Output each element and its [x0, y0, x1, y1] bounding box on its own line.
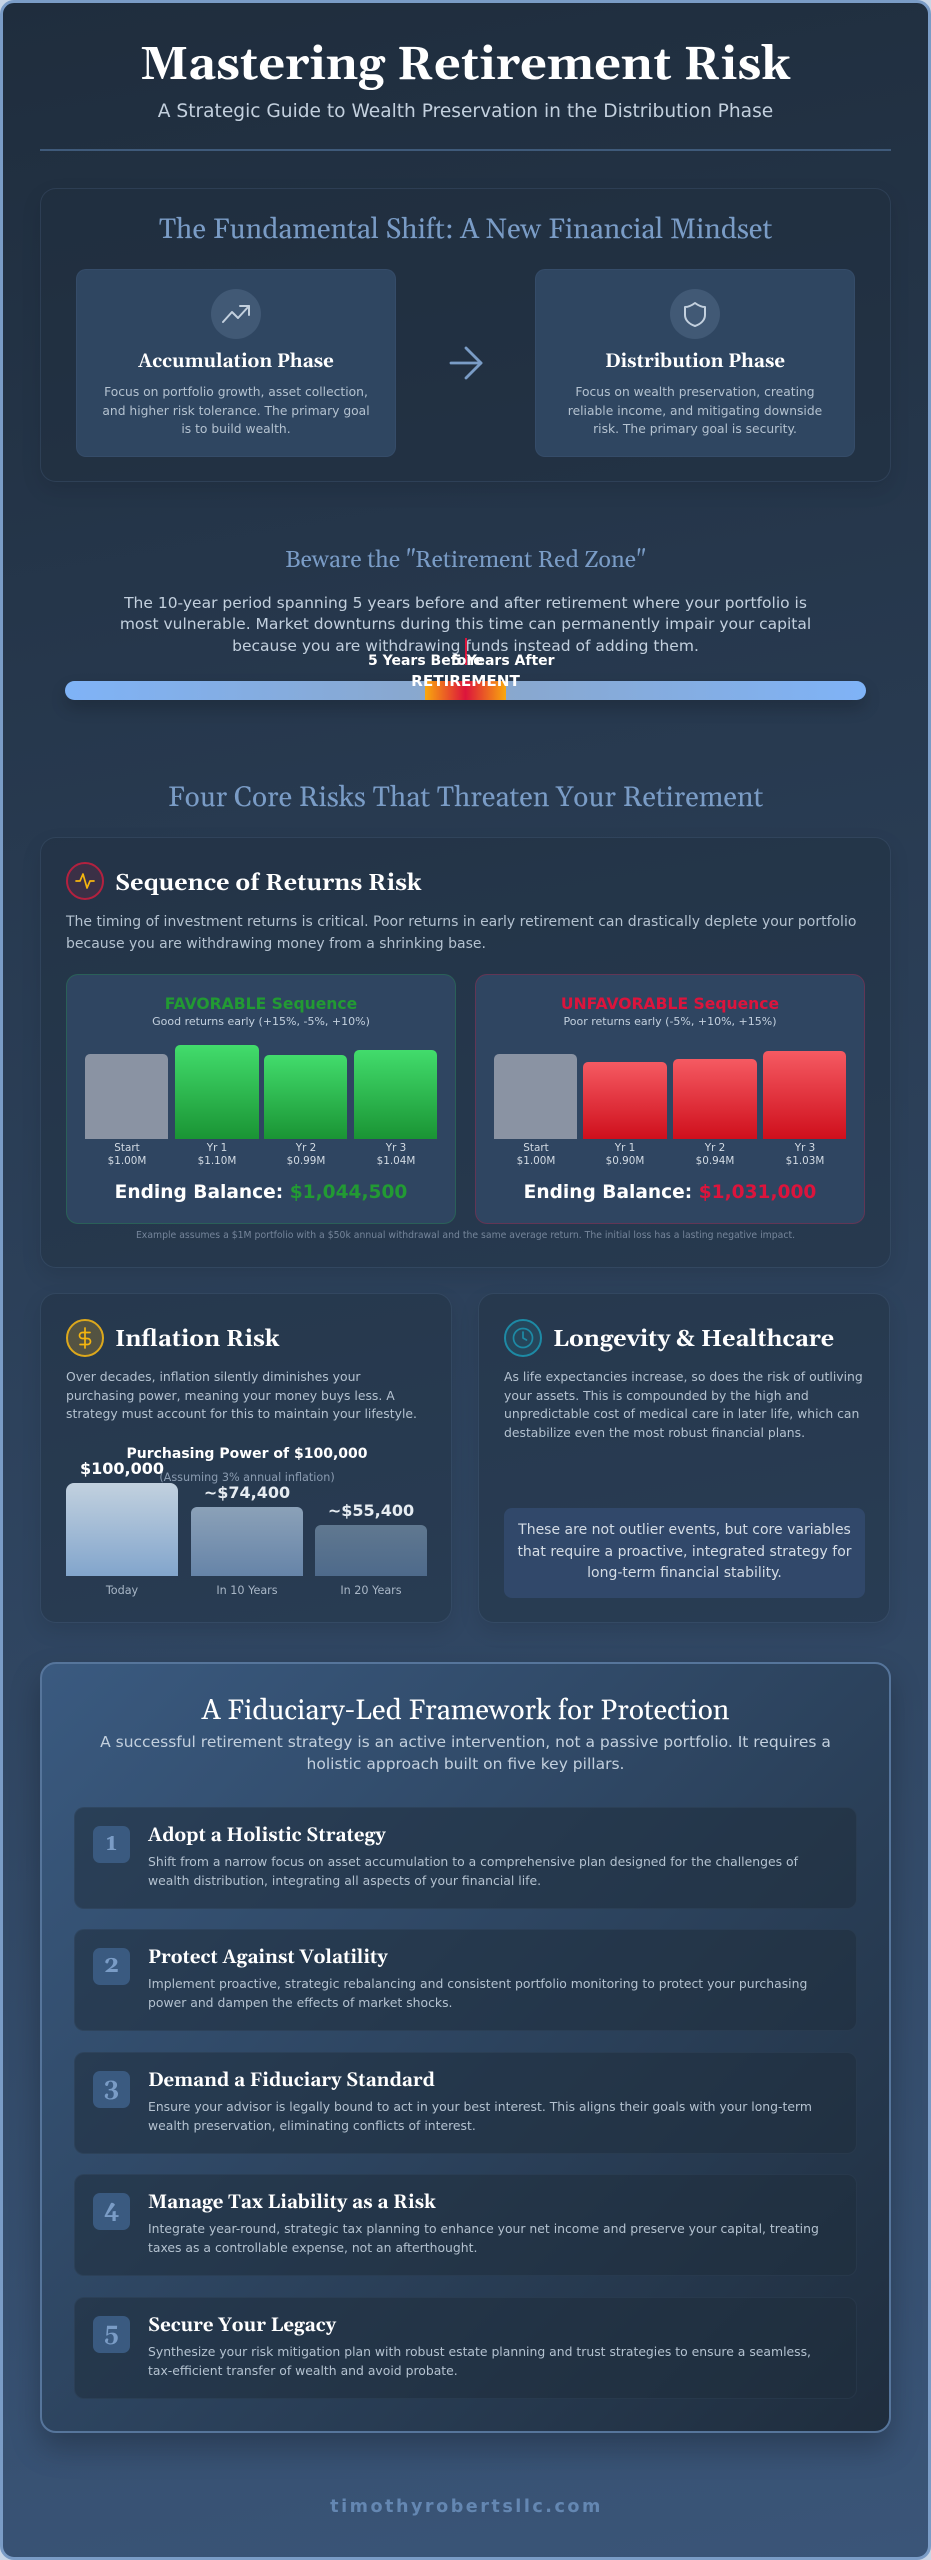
footer: timothyrobertsllc.com — [330, 2497, 603, 2517]
panel: fiduciary-led framework — [40, 1662, 891, 2433]
label: year 2: Yr 2 — [705, 1142, 725, 1154]
label: start: Start — [114, 1142, 140, 1154]
retirement marker — [465, 638, 467, 665]
card: distribution phase — [535, 269, 855, 457]
phase description: Focus on wealth preservation, creating — [575, 385, 815, 399]
phase description — [102, 385, 370, 436]
label: year 2: $0.94M — [696, 1155, 734, 1167]
label: year 2 — [287, 1142, 325, 1167]
heading: framework: A Fiduciary-Led Framework for Protection — [202, 1693, 729, 1729]
phase description: reliable income, and mitigating downside — [568, 404, 822, 418]
pillar description: wealth preservation, eliminating conflicts of interest. — [148, 2118, 476, 2133]
arrow — [450, 346, 482, 380]
callout — [504, 1508, 865, 1598]
risk description: your assets. This is compounded by the high and — [504, 1388, 809, 1403]
card: accumulation phase — [76, 269, 396, 457]
card title: UNFAVORABLE Sequence — [561, 995, 779, 1013]
number — [93, 1826, 130, 1863]
ending balance: Ending Balance: $1,031,000 — [524, 1182, 816, 1203]
text: framework intro: holistic approach built on five key pillars. — [307, 1755, 624, 1773]
pillar title: Adopt a Holistic Strategy — [148, 1825, 386, 1848]
text: framework intro: A successful retirement strategy is an active intervention, not a passive portfolio. It requires a — [100, 1733, 831, 1751]
value: 10 years: ~$74,400 — [204, 1483, 290, 1502]
risk heading: Longevity & Healthcare — [553, 1324, 834, 1354]
label: year 1: Yr 1 — [615, 1142, 635, 1154]
callout: that require a proactive, integrated strategy for — [517, 1544, 852, 1560]
bar: 20 years — [315, 1525, 427, 1576]
pillar 5 — [74, 2297, 857, 2399]
risk description — [504, 1369, 863, 1440]
risk description: The timing of investment returns is critical. Poor returns in early retirement can drastically deplete your portfolio — [66, 914, 856, 930]
text: red zone description: The 10-year period spanning 5 years before and after retirement where your portfolio is — [124, 594, 807, 612]
pillar description: Synthesize your risk mitigation plan with robust estate planning and trust strategies to ensure a seamless, — [148, 2344, 811, 2359]
bar: 10 years — [191, 1507, 302, 1576]
phase description: is to build wealth. — [181, 422, 291, 436]
subtitle: A Strategic Guide to Wealth Preservation in the Distribution Phase — [158, 101, 773, 122]
pillar 2 — [74, 1929, 857, 2031]
risk description: As life expectancies increase, so does the risk of outliving — [504, 1369, 863, 1384]
label: year 3 — [786, 1142, 824, 1167]
text: red zone description: because you are withdrawing funds instead of adding them. — [232, 637, 699, 655]
label: years after: 5 Years After — [452, 653, 555, 669]
label: year 1 — [606, 1142, 644, 1167]
label: today: Today — [106, 1584, 138, 1597]
ending balance: Ending Balance: $1,044,500 — [115, 1182, 407, 1203]
label: start: $1.00M — [517, 1155, 555, 1167]
pillar description — [148, 2099, 812, 2133]
risk description: destabilize even the most robust financial plans. — [504, 1425, 805, 1440]
bar chart — [85, 1045, 437, 1167]
title: Mastering Retirement Risk — [140, 36, 791, 95]
label: year 3: $1.04M — [377, 1155, 415, 1167]
label: year 1: $1.10M — [198, 1155, 236, 1167]
chart subtitle: (Assuming 3% annual inflation) — [159, 1471, 335, 1484]
label: retirement: RETIREMENT — [411, 672, 520, 690]
label: year 3: Yr 3 — [795, 1142, 815, 1154]
footnote: Example assumes a $1M portfolio with a $50k annual withdrawal and the same average return. The initial loss has a lasting negative impact. — [136, 1230, 795, 1241]
label: year 3: Yr 3 — [386, 1142, 406, 1154]
pillar title: Manage Tax Liability as a Risk — [148, 2192, 436, 2215]
pillar description: Integrate year-round, strategic tax planning to enhance your net income and preserve your capital, treating — [148, 2221, 819, 2236]
icon: trending up — [211, 289, 261, 339]
pillar description — [148, 1976, 807, 2010]
label: start — [517, 1142, 555, 1167]
label: start: Start — [523, 1142, 549, 1154]
label: 20 years: In 20 Years — [340, 1584, 402, 1597]
number — [93, 2071, 130, 2108]
number — [93, 2316, 130, 2353]
pillar 1 — [74, 1807, 857, 1909]
label: year 2 — [696, 1142, 734, 1167]
chart card: unfavorable sequence — [475, 974, 865, 1224]
pillar description: Ensure your advisor is legally bound to act in your best interest. This aligns their goals with your long-term — [148, 2099, 812, 2114]
pillar description: wealth distribution, integrating all aspects of your financial life. — [148, 1873, 541, 1888]
heading: fundamental shift: The Fundamental Shift: A New Financial Mindset — [159, 212, 772, 248]
text: red zone description: most vulnerable. Market downturns during this time can permanently impair your capital — [120, 615, 811, 633]
callout: These are not outlier events, but core variables — [518, 1522, 851, 1538]
phase description — [568, 385, 822, 436]
panel: fundamental shift — [40, 188, 891, 482]
pillar description — [148, 1854, 798, 1888]
pillar description: Implement proactive, strategic rebalancing and consistent portfolio monitoring to protect your purchasing — [148, 1976, 807, 1991]
phase title: Distribution Phase — [605, 351, 785, 374]
pillar title: Demand a Fiduciary Standard — [148, 2070, 435, 2093]
card subtitle: Poor returns early (-5%, +10%, +15%) — [564, 1015, 776, 1028]
label: start — [108, 1142, 146, 1167]
bar: start — [494, 1054, 577, 1139]
number: 5 — [104, 2319, 119, 2349]
risk heading: Sequence of Returns Risk — [115, 868, 422, 898]
pillar 3 — [74, 2052, 857, 2154]
bar: year 2 — [264, 1055, 347, 1139]
bar: start — [85, 1054, 168, 1139]
bar chart: purchasing power — [66, 1446, 427, 1597]
text: framework intro — [100, 1733, 831, 1773]
red zone segment — [425, 681, 506, 700]
panel: longevity and healthcare — [478, 1293, 890, 1623]
chart title: Purchasing Power of $100,000 — [126, 1446, 368, 1462]
icon: activity — [66, 862, 104, 900]
pillar 4 — [74, 2174, 857, 2276]
risk description: purchasing power, meaning your money buys less. A — [66, 1388, 395, 1403]
pillar title: Secure Your Legacy — [148, 2315, 336, 2338]
bar: year 2 — [673, 1059, 757, 1139]
chart card: favorable sequence — [66, 974, 456, 1224]
number — [93, 1948, 130, 1985]
value: 20 years: ~$55,400 — [328, 1501, 414, 1520]
number: 4 — [104, 2196, 119, 2226]
risk description: unpredictable cost of medical care in later life, which can — [504, 1406, 859, 1421]
bar: year 3 — [763, 1051, 846, 1139]
panel: inflation risk — [40, 1293, 452, 1623]
text: red zone description — [120, 594, 811, 655]
label: year 3 — [377, 1142, 415, 1167]
timeline bar — [65, 681, 866, 700]
phase description: and higher risk tolerance. The primary goal — [102, 404, 370, 418]
callout: long-term financial stability. — [587, 1565, 782, 1581]
number: 1 — [106, 1829, 117, 1859]
label: year 1: Yr 1 — [207, 1142, 227, 1154]
label: year 2: Yr 2 — [296, 1142, 316, 1154]
icon: dollar — [66, 1319, 104, 1357]
phase description: Focus on portfolio growth, asset collection, — [104, 385, 368, 399]
value: today: $100,000 — [80, 1459, 164, 1478]
label: 10 years: In 10 Years — [216, 1584, 278, 1597]
bar: today — [66, 1483, 178, 1576]
risk heading: Inflation Risk — [115, 1324, 280, 1354]
pillar description — [148, 2344, 811, 2378]
bar chart — [494, 1051, 846, 1167]
label: year 3: $1.03M — [786, 1155, 824, 1167]
risk description — [66, 914, 856, 952]
label: years before: 5 Years Before — [368, 653, 483, 669]
pillar title: Protect Against Volatility — [148, 1947, 388, 1970]
bar: year 1 — [583, 1062, 667, 1139]
pillar description: tax-efficient transfer of wealth and avoid probate. — [148, 2363, 458, 2378]
panel: sequence of returns risk — [40, 837, 891, 1268]
pillar description: power and dampen the effects of market shocks. — [148, 1995, 452, 2010]
risk description — [66, 1369, 417, 1421]
phase title: Accumulation Phase — [138, 351, 334, 374]
label: year 2: $0.99M — [287, 1155, 325, 1167]
number — [93, 2193, 130, 2230]
heading: red zone: Beware the "Retirement Red Zone" — [285, 545, 646, 575]
risk description: Over decades, inflation silently diminishes your — [66, 1369, 361, 1384]
icon: clock — [504, 1319, 542, 1357]
risk description: because you are withdrawing money from a shrinking base. — [66, 936, 486, 952]
timeline: retirement red zone — [65, 638, 866, 708]
label: year 1 — [198, 1142, 236, 1167]
pillar description — [148, 2221, 819, 2255]
card title: FAVORABLE Sequence — [165, 995, 357, 1013]
pillar description: taxes as a controllable expense, not an afterthought. — [148, 2240, 477, 2255]
label: year 1: $0.90M — [606, 1155, 644, 1167]
number: 3 — [104, 2074, 119, 2104]
label: start: $1.00M — [108, 1155, 146, 1167]
pillar description: Shift from a narrow focus on asset accumulation to a comprehensive plan designed for the challenges of — [148, 1854, 798, 1869]
card subtitle: Good returns early (+15%, -5%, +10%) — [152, 1015, 370, 1028]
bar: year 1 — [175, 1045, 259, 1139]
bar: year 3 — [354, 1050, 437, 1139]
heading: four core risks: Four Core Risks That Threaten Your Retirement — [168, 780, 763, 816]
risk description: strategy must account for this to maintain your lifestyle. — [66, 1406, 417, 1421]
icon: shield — [670, 289, 720, 339]
number: 2 — [104, 1951, 119, 1981]
phase description: risk. The primary goal is security. — [593, 422, 797, 436]
